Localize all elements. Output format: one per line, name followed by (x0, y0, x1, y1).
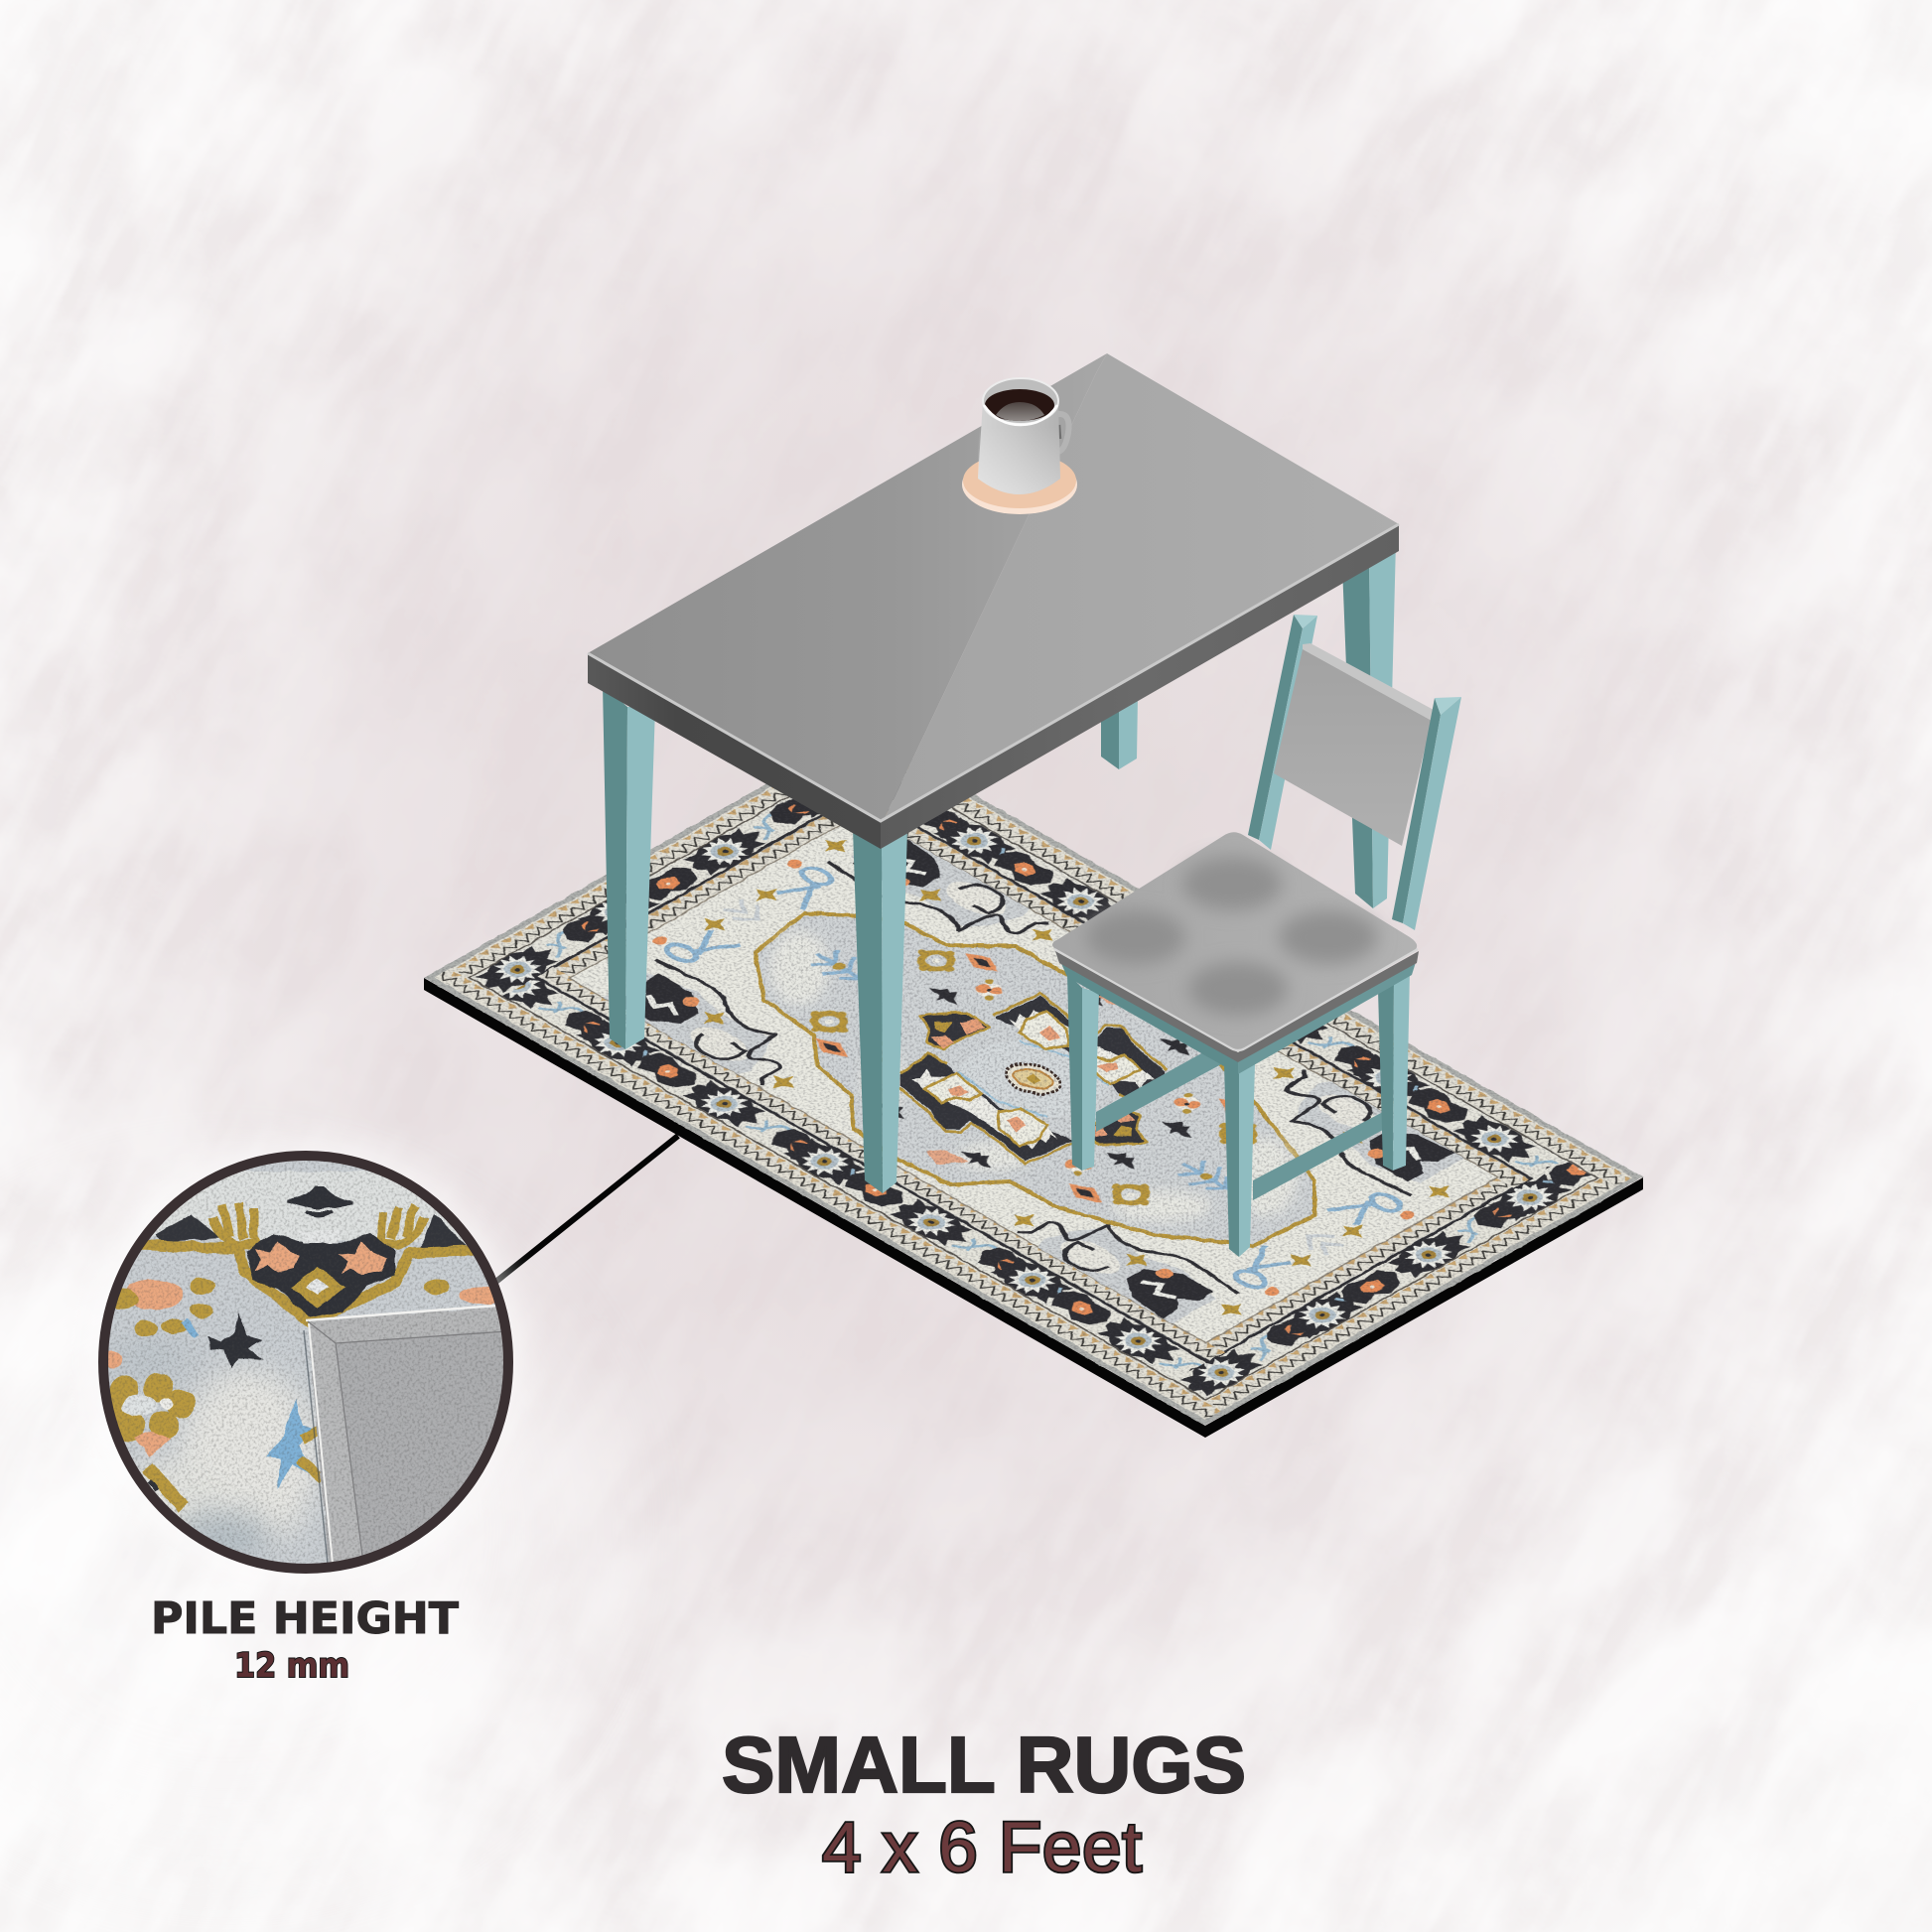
seat dimples (1086, 857, 1378, 1016)
chair: back panel (1274, 643, 1434, 846)
pile height label: PILE HEIGHT (151, 1593, 459, 1644)
rug: outer zigzag border (434, 736, 1633, 1420)
rug: grey lobed field with gold outline (755, 913, 1314, 1246)
rug: black underside edge (424, 978, 1643, 1438)
table: back right leg (1342, 541, 1396, 908)
rug: isometric carpet with borders and field (424, 730, 1643, 1426)
chair: seat aprons (1059, 959, 1417, 1074)
chair: stretchers (1096, 1052, 1383, 1200)
rug: central medallion (899, 993, 1167, 1165)
title: SMALL RUGS (722, 1721, 1246, 1809)
chair: right back post (1392, 697, 1461, 930)
chair: left back post (1248, 615, 1317, 850)
chair: legs (1067, 968, 1410, 1257)
connector line from rug edge to close-up (493, 1136, 678, 1284)
pile height label: 12 mm (234, 1646, 349, 1686)
rug: inner zigzag border (538, 794, 1529, 1361)
rug: scattered small motifs (709, 893, 1336, 1251)
table: top with side faces (588, 353, 1399, 849)
table: front left leg (603, 685, 655, 1049)
table: back left leg (1101, 695, 1138, 769)
coffee mug (978, 378, 1069, 494)
subtitle: 4 x 6 Feet (822, 1809, 1142, 1887)
table: front leg (853, 829, 907, 1193)
coaster (962, 453, 1077, 514)
pile height label (151, 1593, 459, 1686)
close-up circle: rug corner detail (85, 1138, 526, 1588)
chair: seat (1052, 832, 1419, 1062)
rug: cream central field and corner motifs (569, 812, 1498, 1343)
rug: dark floral main border (470, 756, 1597, 1400)
